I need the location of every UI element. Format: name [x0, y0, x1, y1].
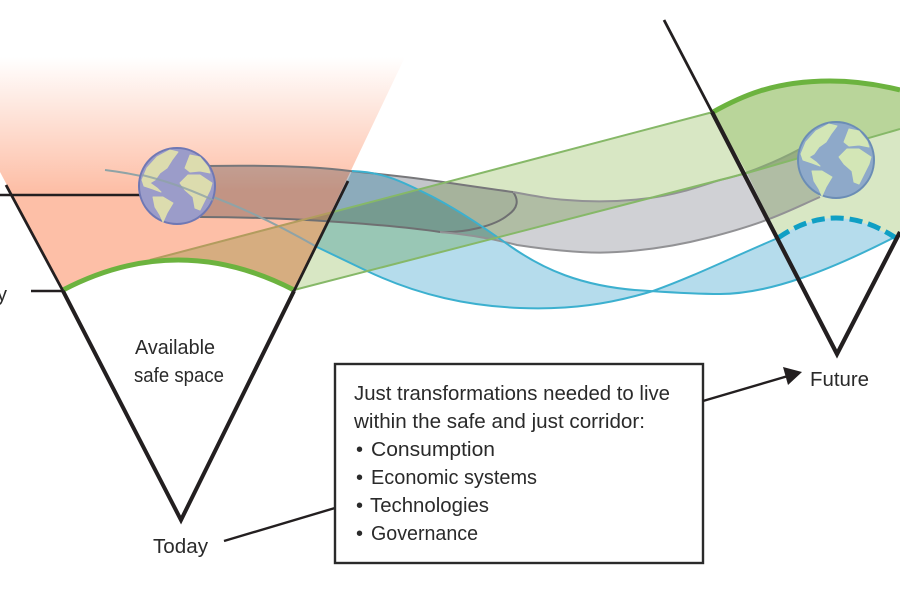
label: available safe space: Available	[135, 337, 215, 359]
region: green future zone	[713, 81, 900, 173]
funnel: today	[6, 181, 348, 520]
curve: green safe boundary future	[713, 81, 900, 112]
callout heading: within the safe and just corridor:	[353, 411, 645, 433]
connector: today to box	[224, 508, 335, 541]
callout list: •	[356, 495, 363, 517]
outline: green corridor lines	[150, 112, 900, 290]
band: blue corridor fill	[317, 171, 893, 308]
arrow: box to future	[703, 367, 802, 401]
label: available safe space	[134, 337, 224, 387]
band: grey pathway fill	[200, 149, 820, 253]
label: available safe space: safe space	[134, 365, 224, 387]
band: green corridor fill	[150, 81, 900, 290]
leader line: boundary	[31, 290, 63, 292]
callout list: Technologies	[370, 495, 489, 517]
globe: today	[139, 148, 215, 224]
label: future: Future	[810, 369, 869, 391]
outline: blue corridor curves	[105, 170, 893, 308]
panel: unsafe red zone	[0, 57, 405, 290]
callout box	[335, 364, 703, 563]
callout list: •	[356, 439, 363, 461]
callout list	[356, 439, 537, 545]
callout heading: Just transformations needed to live	[354, 383, 670, 405]
curve: dashed blue just boundary	[778, 218, 896, 238]
callout list: Governance	[371, 523, 478, 545]
curve: green safe boundary today	[63, 260, 294, 290]
outline: pathway strokes	[200, 149, 820, 253]
region: darker pathway start	[200, 166, 517, 232]
callout list: •	[356, 523, 363, 545]
leader line: globe	[0, 194, 140, 196]
callout heading	[353, 383, 670, 433]
callout list: Consumption	[371, 439, 495, 461]
callout list: •	[356, 467, 363, 489]
globe: future	[798, 122, 874, 198]
label: today: Today	[153, 536, 208, 558]
funnel: future	[664, 20, 900, 354]
callout list: Economic systems	[371, 467, 537, 489]
